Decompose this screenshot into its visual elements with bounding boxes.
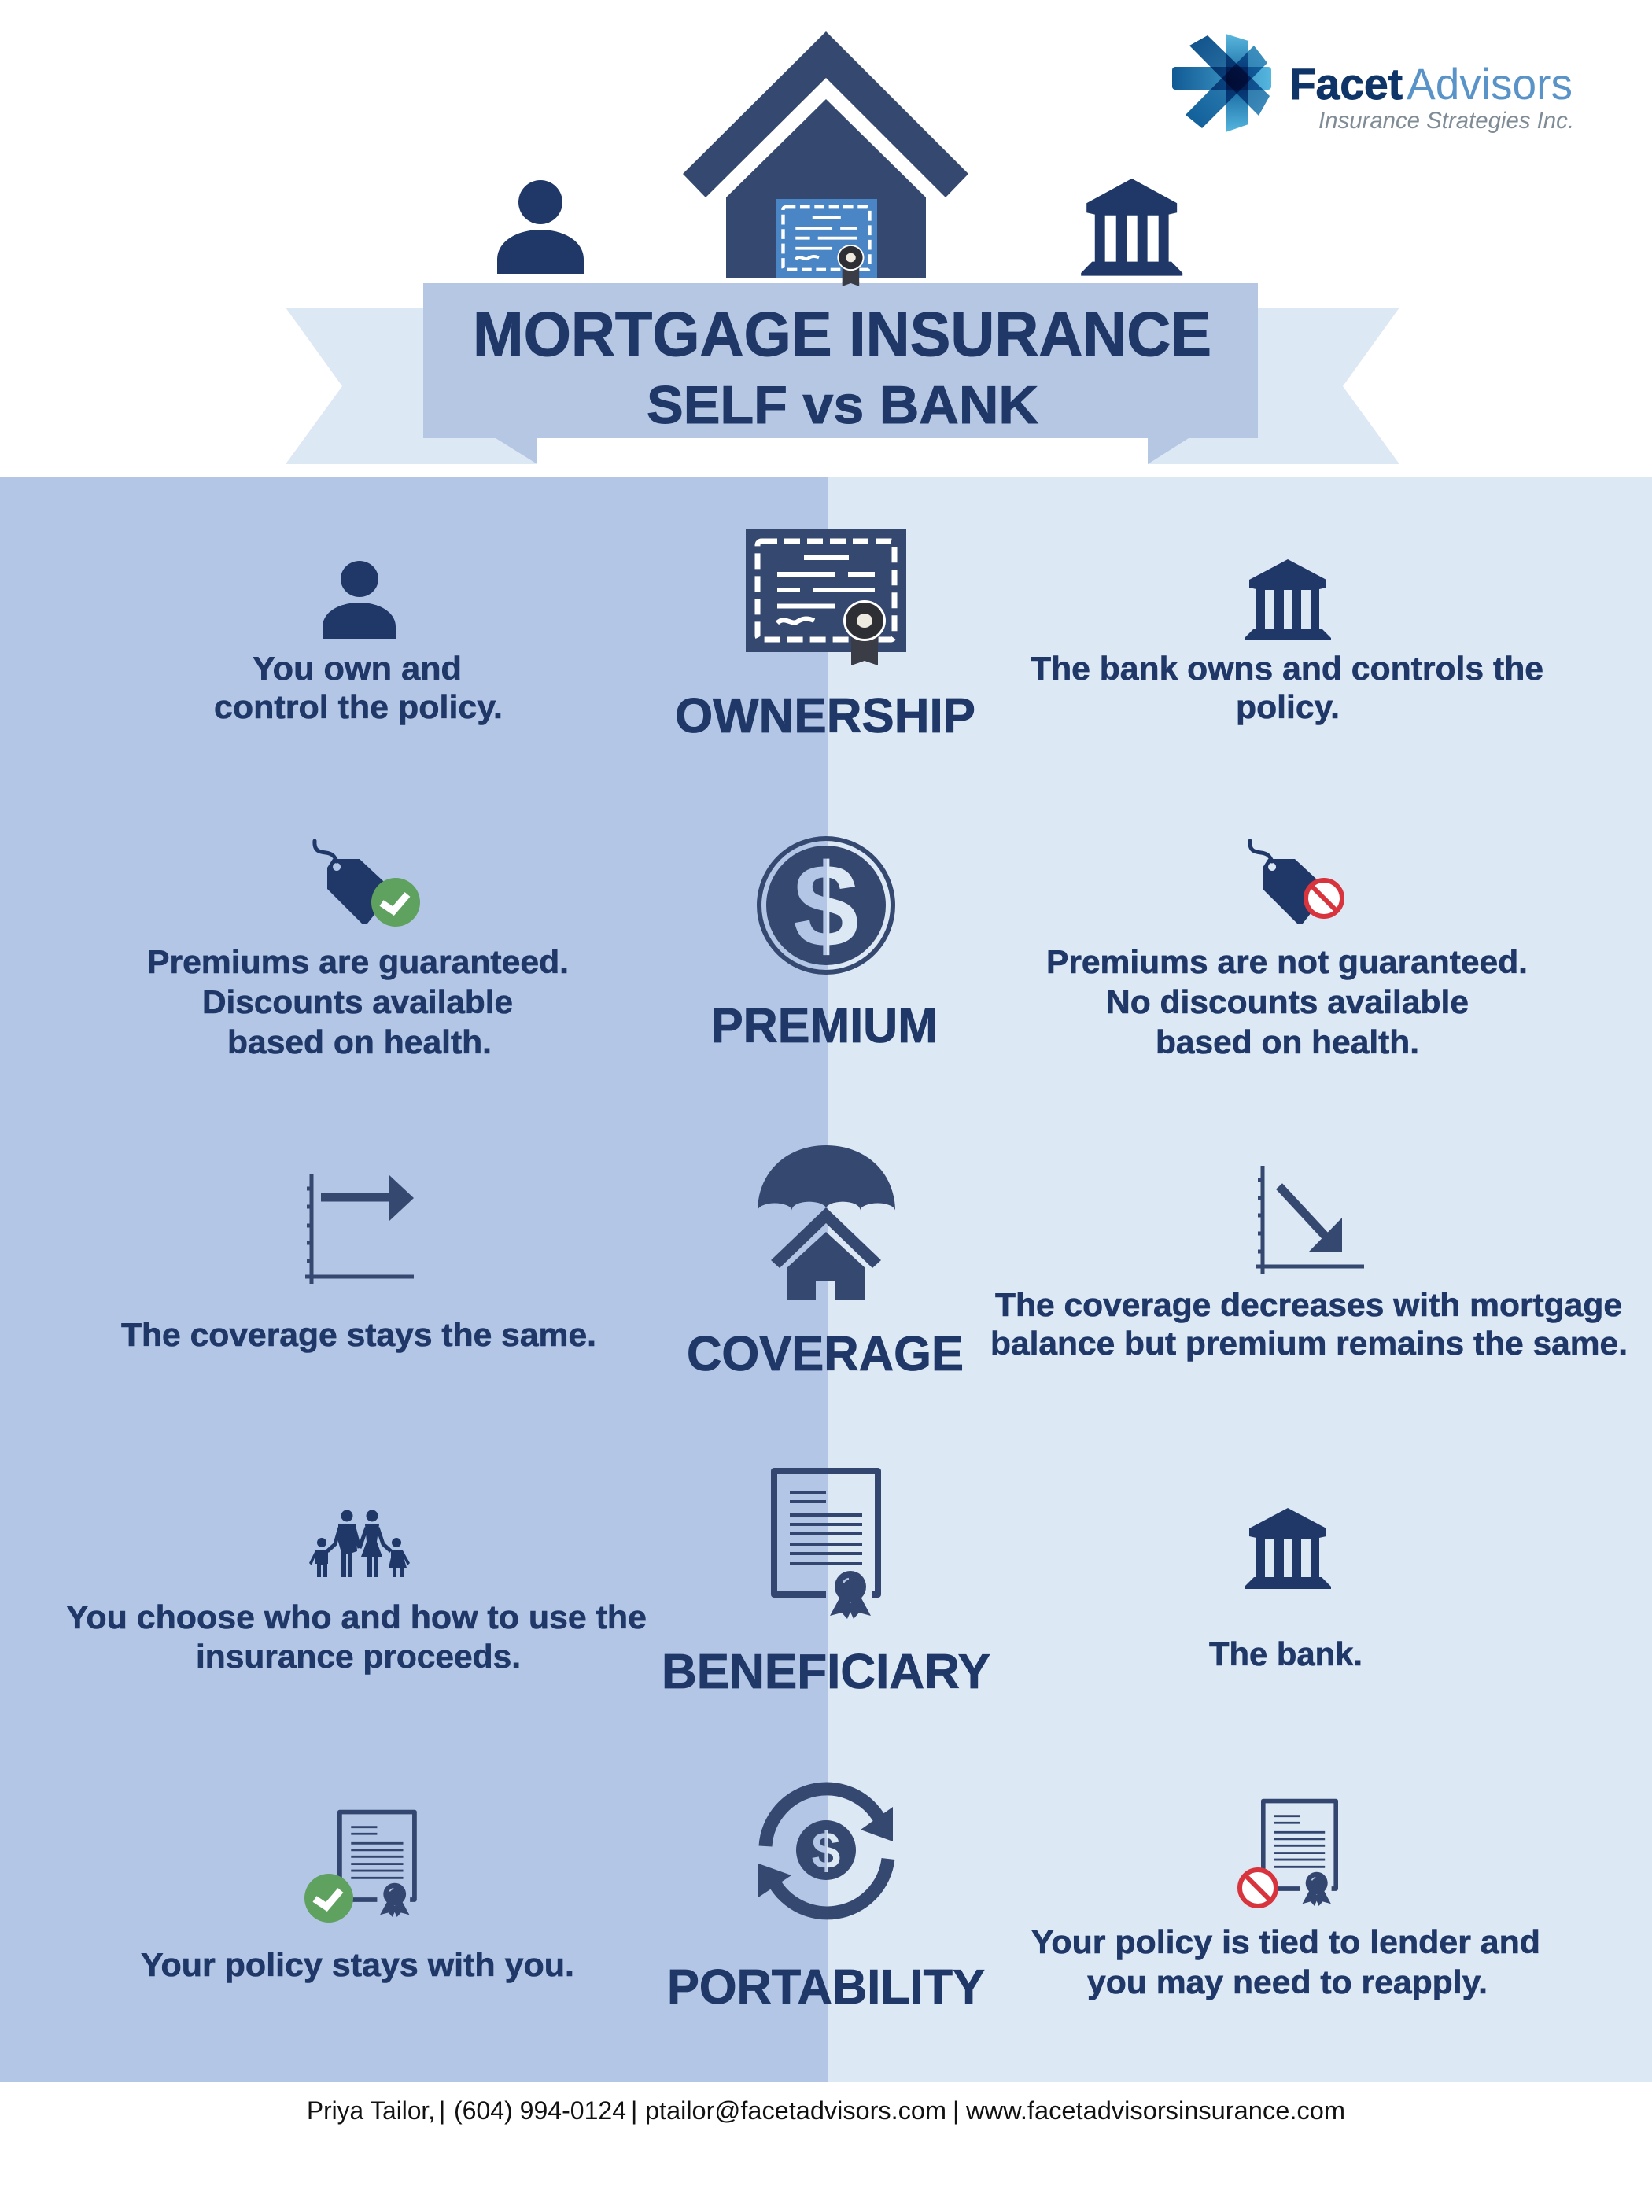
text: bank coverage [990, 1286, 1628, 1362]
panel: self column background [0, 477, 828, 2082]
heading: coverage: COVERAGE [687, 1327, 964, 1381]
icon: person [497, 180, 584, 274]
icon: policy with check [304, 1812, 415, 1923]
icon: house with certificate [683, 31, 968, 286]
heading: portability: PORTABILITY [667, 1960, 985, 2015]
banner ribbon [286, 283, 1399, 464]
icon: certificate [746, 529, 906, 665]
text: bank portability: Your policy is tied to lender and [1031, 1923, 1540, 1960]
text: self portability: Your policy stays with you. [141, 1946, 574, 1983]
text: self coverage: The coverage stays the same. [121, 1316, 596, 1353]
logo: Facet Advisors [1172, 34, 1574, 134]
text: bank beneficiary: The bank. [1209, 1635, 1363, 1672]
text: self premium: Premiums are guaranteed. [147, 943, 569, 980]
text: bank coverage: balance but premium remains the same. [990, 1325, 1628, 1362]
icon: circular dollar arrows: $ [812, 1821, 840, 1879]
text: self premium: Discounts available [202, 983, 513, 1020]
title [473, 299, 1211, 435]
footer contact line: | [631, 2096, 637, 2125]
icon: dollar coin [759, 839, 893, 972]
footer contact line: ptailor@facetadvisors.com [645, 2096, 946, 2125]
icon: bank [1245, 559, 1331, 640]
icon: person [323, 561, 396, 639]
icon: bank [1081, 179, 1182, 276]
text: bank premium: Premiums are not guaranteed. [1046, 943, 1528, 980]
text: self beneficiary [66, 1598, 647, 1675]
panel: premium row [147, 839, 1528, 1060]
icon: policy document [774, 1471, 878, 1619]
text: bank portability [1031, 1923, 1540, 2000]
text: self ownership [214, 650, 503, 725]
text: self beneficiary: You choose who and how to use the [66, 1598, 647, 1635]
text: bank premium: based on health. [1156, 1023, 1419, 1060]
title line 1: MORTGAGE INSURANCE [473, 299, 1211, 369]
text: self ownership: control the policy. [214, 688, 503, 725]
panel: bank column background [828, 477, 1652, 2082]
footer contact line: Priya Tailor, [307, 2096, 435, 2125]
text: bank premium: No discounts available [1106, 983, 1469, 1020]
footer contact line: | [439, 2096, 445, 2125]
text: bank ownership: The bank owns and controls the [1031, 650, 1543, 687]
icon: tag with check [315, 841, 420, 927]
icon: circular dollar arrows [758, 1789, 893, 1913]
icon: family [309, 1510, 410, 1577]
panel: coverage row [121, 1145, 1628, 1381]
panel: beneficiary row [66, 1471, 1363, 1699]
heading: ownership: OWNERSHIP [675, 689, 975, 743]
icon: tag with prohibition [1250, 841, 1342, 924]
icon: umbrella over house [758, 1145, 895, 1300]
logo name light: Advisors [1407, 59, 1573, 109]
logo name: Facet [1289, 59, 1403, 109]
heading: beneficiary: BENEFICIARY [662, 1645, 990, 1699]
ribbon folds [496, 438, 1189, 464]
logo tagline: Insurance Strategies Inc. [1318, 108, 1574, 134]
text: bank coverage: The coverage decreases with mortgage [995, 1286, 1622, 1323]
footer contact line: www.facetadvisorsinsurance.com [965, 2096, 1345, 2125]
text: self premium: based on health. [227, 1023, 492, 1060]
text: bank premium [1046, 943, 1528, 1060]
text: self ownership: You own and [253, 650, 462, 687]
icon: bank [1245, 1508, 1331, 1589]
panel: ownership row [214, 529, 1543, 743]
text: bank ownership [1031, 650, 1543, 725]
icon: flat chart [305, 1174, 414, 1284]
footer contact line: (604) 994-0124 [454, 2096, 626, 2125]
text: self beneficiary: insurance proceeds. [196, 1638, 521, 1675]
footer contact line: | [953, 2096, 959, 2125]
title line 2: SELF vs BANK [647, 375, 1038, 435]
ribbon tails [286, 308, 1399, 464]
text: bank ownership: policy. [1236, 688, 1340, 725]
heading: premium: PREMIUM [711, 999, 938, 1053]
footer contact line [307, 2096, 1345, 2125]
text: self premium [147, 943, 569, 1060]
panel: portability row [141, 1789, 1540, 2015]
logo star [1172, 34, 1271, 132]
banner body [423, 283, 1258, 438]
icon: decreasing chart [1256, 1166, 1364, 1274]
icon: dollar coin: $ [793, 839, 859, 971]
text: bank portability: you may need to reapply. [1087, 1963, 1488, 2000]
icon: policy with prohibition [1240, 1801, 1336, 1906]
